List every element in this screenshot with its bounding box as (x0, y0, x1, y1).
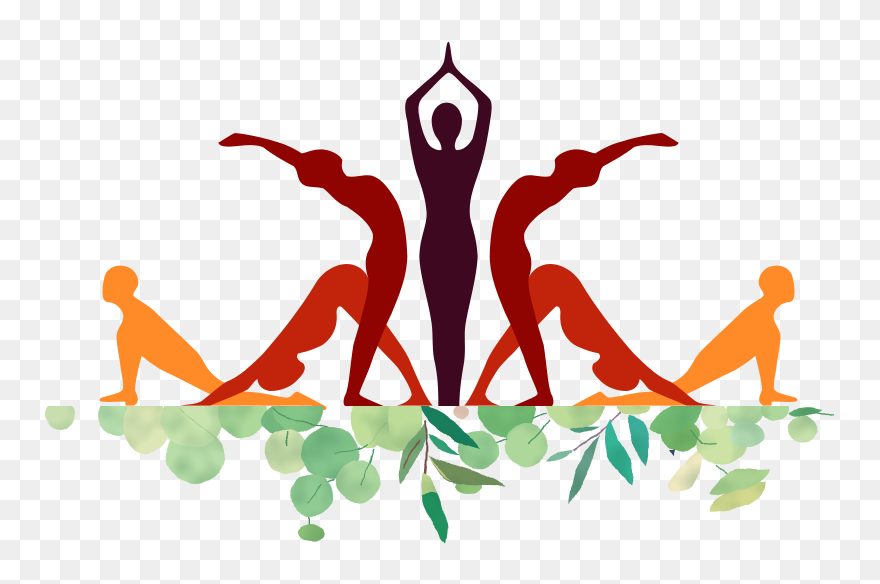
figures: right side poses, mirrored (464, 133, 797, 410)
leaf: cluster (98, 406, 422, 484)
figures: left side poses (100, 133, 433, 410)
leaf: centre eucalyptus (388, 406, 422, 450)
figures group (100, 42, 797, 410)
leaf: green rounds (458, 431, 499, 469)
icon: central standing prayer pose figure (405, 42, 492, 406)
leaf: small dark (428, 433, 459, 455)
leaves: all foliage clipped at the horizon (44, 406, 834, 544)
flower hint (453, 405, 470, 418)
leaf: far left small (45, 400, 75, 430)
leaf: long green lower (421, 472, 448, 543)
stem: brown branch (424, 420, 427, 483)
leaves: center and right foliage (388, 406, 834, 544)
icon: orange cobra pose figure (100, 266, 326, 410)
teal pointed leaves (547, 412, 649, 504)
icon: red downward dog pose figure (180, 264, 433, 406)
leaf: round small (455, 484, 482, 494)
leaf: olive pointed (428, 455, 506, 486)
icon: dark red side bend figure (218, 133, 407, 406)
leaves: left eucalyptus cluster (44, 406, 422, 542)
leaf: brown-green pointed (399, 423, 426, 485)
leaf: right green cluster (648, 393, 834, 512)
stems and veins (180, 408, 387, 533)
leaf: dark teal pointed (420, 406, 480, 449)
leaf: green trio (290, 427, 380, 542)
